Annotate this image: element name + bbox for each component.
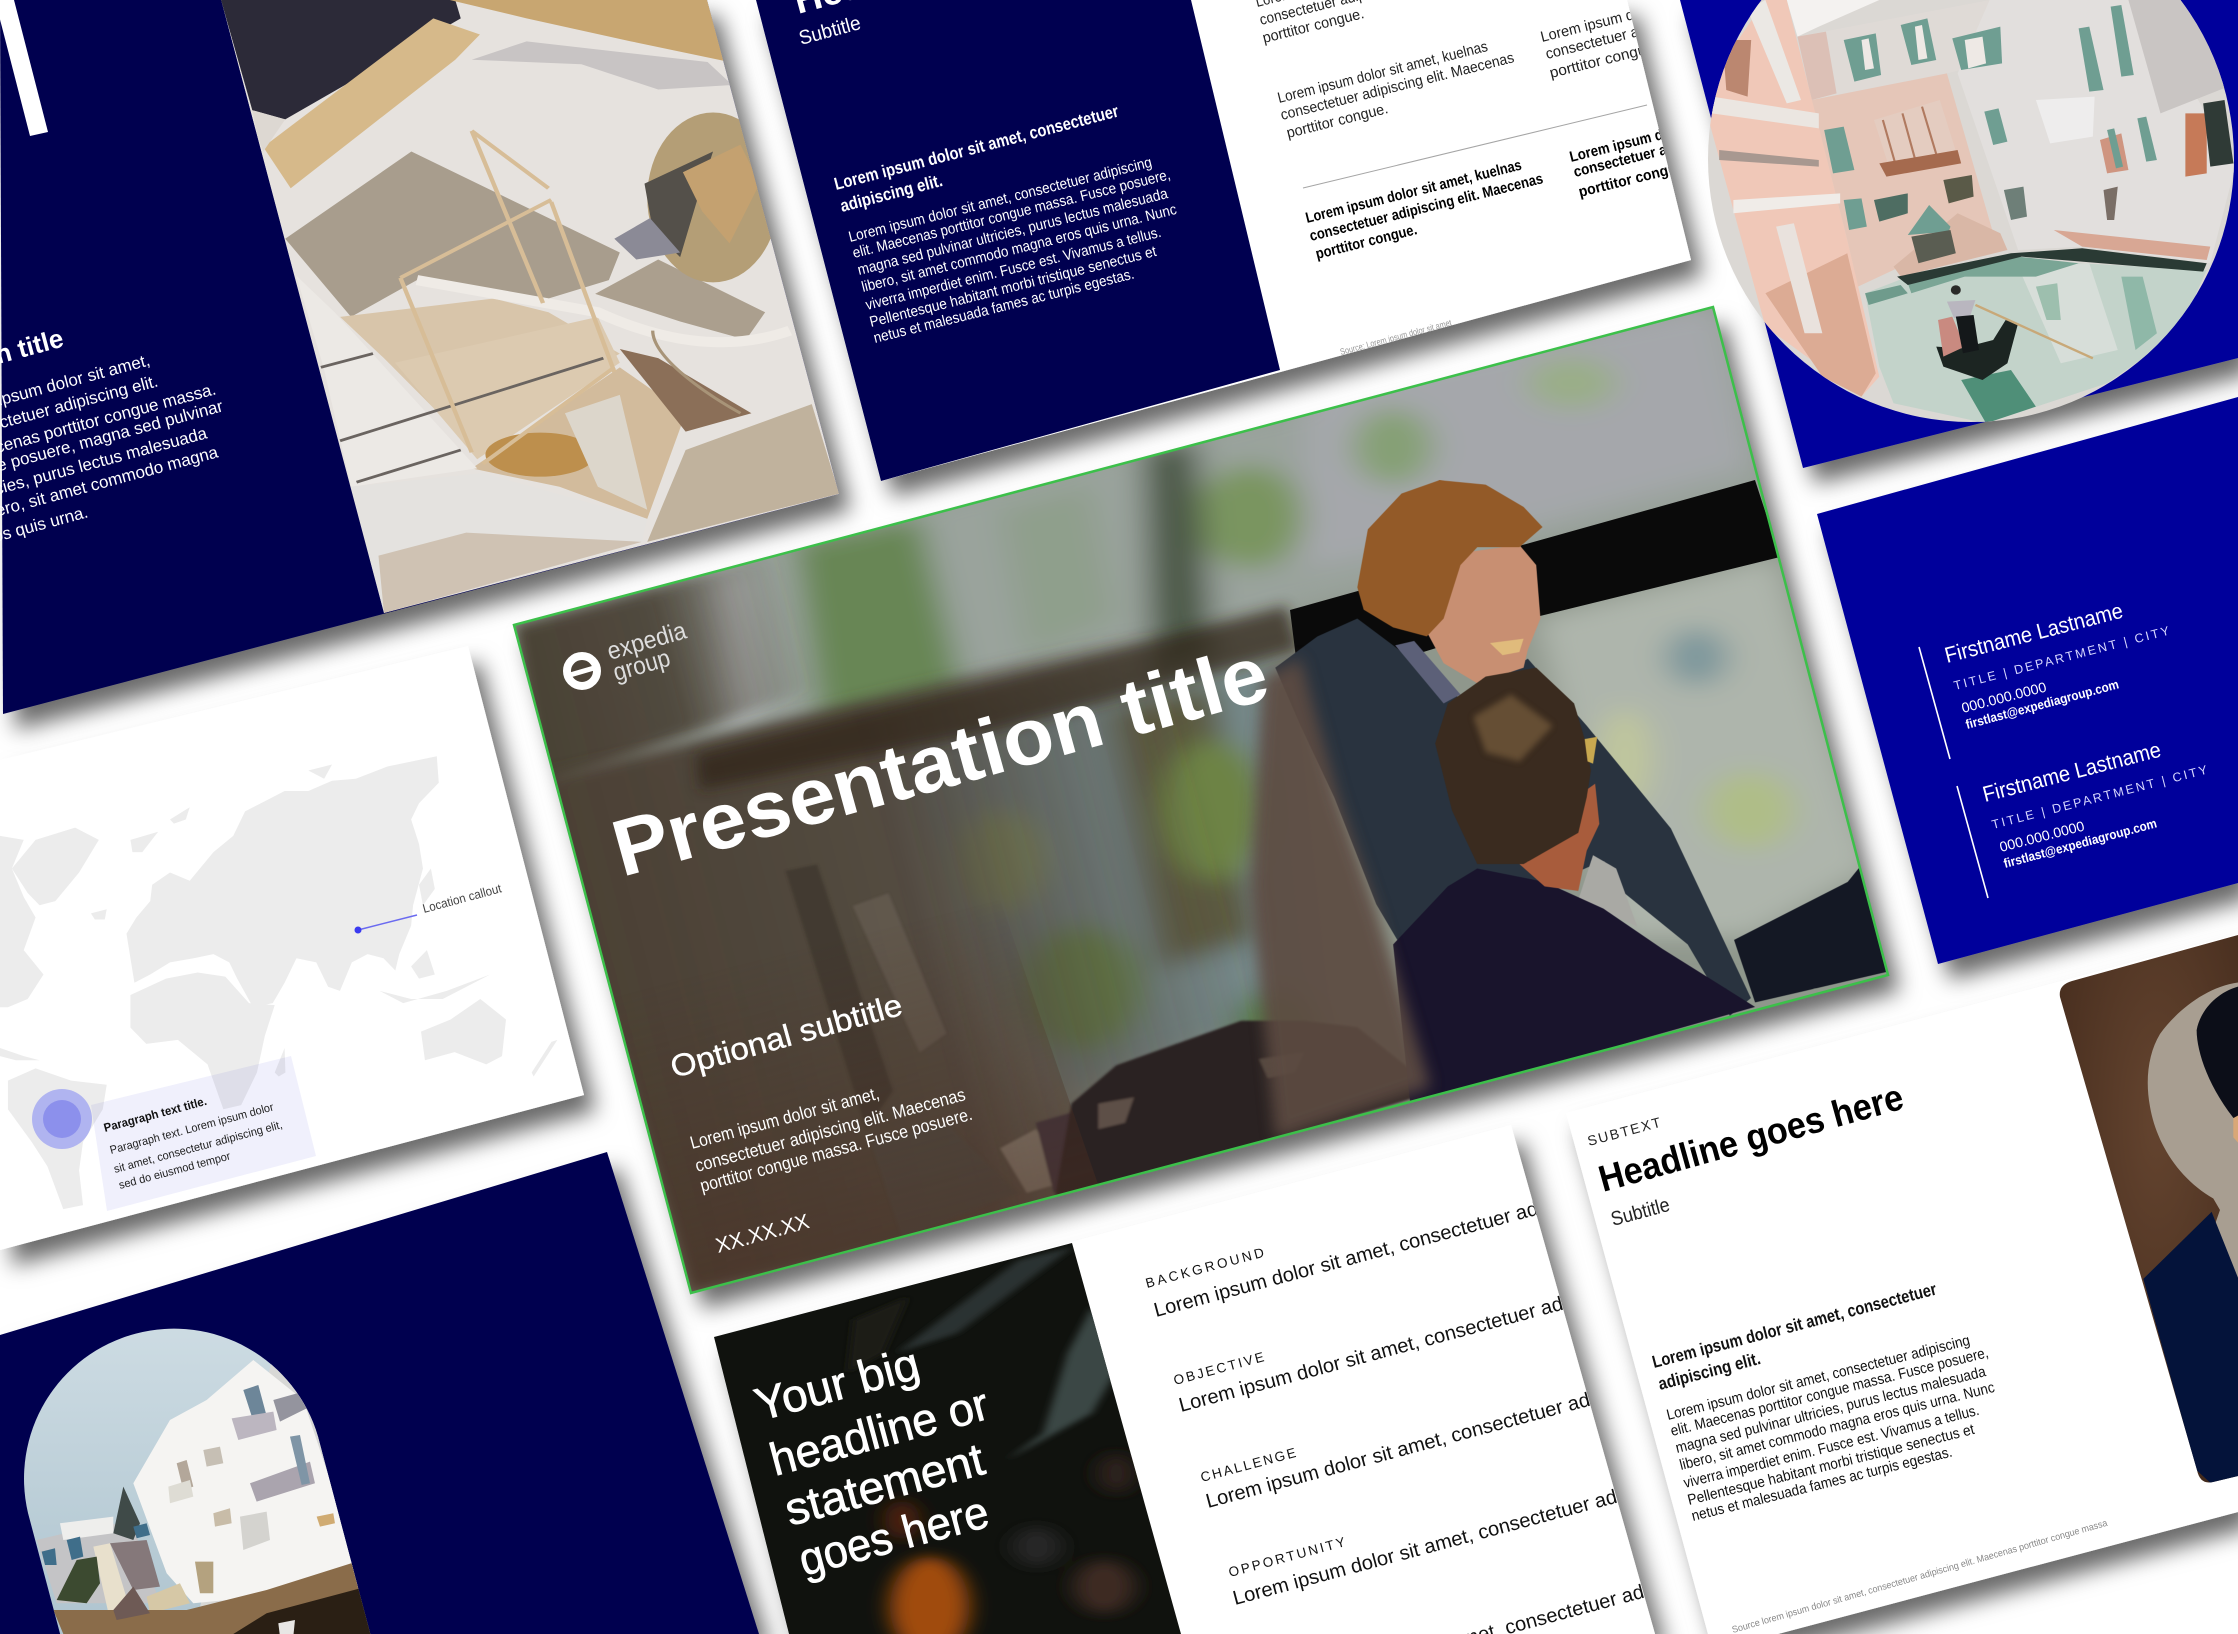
accent bar [0,0,48,136]
navy paragraph block: Pellentesque habitant morbi tristique senectus et [868,243,1159,331]
list rows: Lorem ipsum dolor sit amet, consectetuer adipiscing elit [1152,1172,1636,1322]
paragraph callout card: Paragraph text. Lorem ipsum dolor [109,1102,275,1157]
paragraph callout card: Paragraph text title. [102,1094,208,1135]
people [1250,480,1890,1140]
man in sweater [1275,480,1751,1016]
contact block 1: firstlast@expediagroup.com [1964,677,2120,732]
navy paragraph block: Lorem ipsum dolor sit amet, consectetuer adipiscing [847,154,1154,246]
white columns of text: porttitor congue. [1548,38,1661,82]
navy paragraph block: magna sed pulvinar ultricies, purus lectus malesuada [856,185,1170,279]
location callout [354,881,503,934]
monitor shapes [786,865,1070,1193]
intro text: porttitor congue massa. Fusce posuere. [698,1104,974,1196]
list rows: OPPORTUNITY [1227,1534,1347,1580]
paragraph block: magna sed pulvinar ultricies, purus lectus malesuada [1674,1363,1988,1457]
photo: white hillside houses in arch [24,1328,370,1634]
panel: navy slide with interior photo [0,0,845,714]
location callout: Location callout [421,881,503,916]
photo: dark foliage [714,1243,1181,1634]
list rows: Lorem ipsum dolor sit amet, consectetuer adipiscing elit [1204,1363,1688,1513]
list rows: BACKGROUND [1144,1245,1266,1291]
navy paragraph block [832,101,1179,347]
warm vignette at bottom left [600,900,1100,1293]
black window frame [1290,480,1780,690]
photo: Venice canal in circle [1680,0,2238,433]
contact block 1: 000.000.0000 [1960,679,2048,716]
photo: portrait with headscarf [2060,935,2238,1482]
white columns of text [1256,0,1670,355]
list rows: Lorem ipsum dolor sit amet, consectetuer adipiscing elit [1177,1267,1661,1417]
subtitle: Subtitle [797,12,863,50]
white columns of text: porttitor congue. [1577,157,1690,201]
bag and hand, lower centre [1054,1021,1438,1206]
navy paragraph block: elit. Maecenas porttitor congue massa. Fusce posuere, [851,166,1172,262]
left brown overlay, upper [516,561,800,781]
photo: colleagues laughing by window [500,300,1890,1293]
section body text [0,351,225,550]
photo: terrace furniture [221,0,845,615]
world map [0,756,557,1209]
white columns of text: porttitor congue. [1314,221,1419,263]
list rows: OBJECTIVE [1172,1349,1266,1388]
contact block 1: Firstname Lastname [1942,598,2125,668]
contact block 1: TITLE | DEPARTMENT | CITY [1952,624,2171,693]
panel: blue slide with circular Venice photo [1680,0,2238,468]
expedia group logo [567,617,690,687]
expedia group logo: expedia [604,617,690,666]
subtext: SUBTEXT [1586,1114,1663,1149]
paragraph block [1650,1279,1997,1525]
contact block 2: TITLE | DEPARTMENT | CITY [1990,763,2209,832]
panel: statement and list slide [700,1125,1742,1634]
paragraph block: libero, sit amet commodo magna eros quis urna. Nunc [1678,1379,1997,1474]
navy paragraph block: netus et malesuada fames ac turpis egestas. [872,266,1136,347]
panel: white headline slide with portrait [1566,919,2238,1634]
big statement: statement [779,1433,990,1536]
contact block 2: Firstname Lastname [1980,737,2163,807]
big statement [749,1337,994,1586]
panel: world map slide [0,646,584,1250]
big statement: goes here [793,1485,994,1586]
green slide border [514,307,1888,1293]
optional subtitle: Optional subtitle [667,987,906,1085]
contact block 1 [1919,598,2171,759]
paragraph block: Lorem ipsum dolor sit amet, consectetuer adipiscing [1665,1332,1972,1424]
paragraph callout card: sed do eiusmod tempor [118,1151,232,1192]
white columns of text: porttitor congue. [1261,5,1366,47]
blurred garden background [676,308,1858,1078]
date: XX.XX.XX [713,1210,812,1258]
white columns of text: consectetuer adipiscing elit. Maecenas [1572,104,1819,181]
white columns of text: consectetuer adipiscing elit. Maecenas [1308,170,1545,245]
subtitle: Subtitle [1609,1194,1672,1231]
navy paragraph block: Lorem ipsum dolor sit amet, consectetuer [832,101,1121,194]
headline: Headline goes here [1594,1076,1908,1200]
big statement: headline or [764,1377,994,1486]
paragraph callout card: sit amet, consectetur adipiscing elit, [113,1119,284,1176]
contact block 2: firstlast@expediagroup.com [2002,816,2158,871]
big statement: Your big [749,1337,925,1431]
panel: central title slide [500,300,1890,1293]
navy paragraph block: libero, sit amet commodo magna eros quis urna. Nunc [860,201,1179,296]
footnote: Source lorem ipsum dolor sit amet, consectetuer adipiscing elit. Maecenas porttitor congue massa [1731,1518,2109,1634]
paragraph block: netus et malesuada fames ac turpis egestas. [1690,1444,1954,1525]
contact block 2: 000.000.0000 [1998,818,2086,855]
contact block 2 [1957,737,2209,898]
list rows [1146,1201,1644,1634]
white columns of text: porttitor congue. [1285,100,1390,142]
expedia group logo: group [610,644,673,687]
list rows: CHALLENGE [1199,1445,1297,1485]
paragraph block: Lorem ipsum dolor sit amet, consectetuer [1650,1279,1939,1372]
dark jacket on right [1734,866,1890,1002]
navy paragraph block: viverra imperdiet enim. Fusce est. Vivamus a tellus. [864,224,1163,314]
white columns of text: consectetuer adipiscing elit. Maecenas [1279,49,1516,124]
white columns of text: Source: Lorem ipsum dolor sit amet [1339,317,1453,357]
panel: navy slide with arched photo [0,1152,759,1634]
paragraph block: elit. Maecenas porttitor congue massa. Fusce posuere, [1669,1344,1990,1440]
panel: blue contact slide [1817,397,2238,964]
intro text: Lorem ipsum dolor sit amet, [688,1083,881,1153]
white columns of text: Lorem ipsum dolor sit amet, kuelnas [1276,38,1490,107]
white columns of text: Lorem ipsum dolor sit amet, kuelnas [1568,93,1797,166]
intro text: consectetuer adipiscing elit. Maecenas [693,1084,968,1176]
white columns of text: Lorem ipsum dolor sit amet, kuelnas [1304,157,1523,227]
navy paragraph block: adipiscing elit. [838,170,945,216]
paragraph block: viverra imperdiet enim. Fusce est. Vivamus a tellus. [1682,1402,1981,1492]
panel: navy and white text slide [756,0,1819,481]
paragraph callout card [91,1056,316,1211]
paragraph block: Pellentesque habitant morbi tristique senectus et [1686,1421,1977,1509]
list rows: Lorem ipsum dolor sit amet, consectetuer adipiscing elit [1231,1460,1715,1610]
presentation title: Presentation title [603,628,1277,893]
paragraph block: adipiscing elit. [1656,1348,1763,1394]
dark band under title edge [696,606,1300,790]
location marker [32,1089,92,1149]
blurred foreground brown column [1250,659,1431,1140]
man seen from behind [1393,668,1755,1110]
left brown overlay, lower [556,637,1228,1292]
